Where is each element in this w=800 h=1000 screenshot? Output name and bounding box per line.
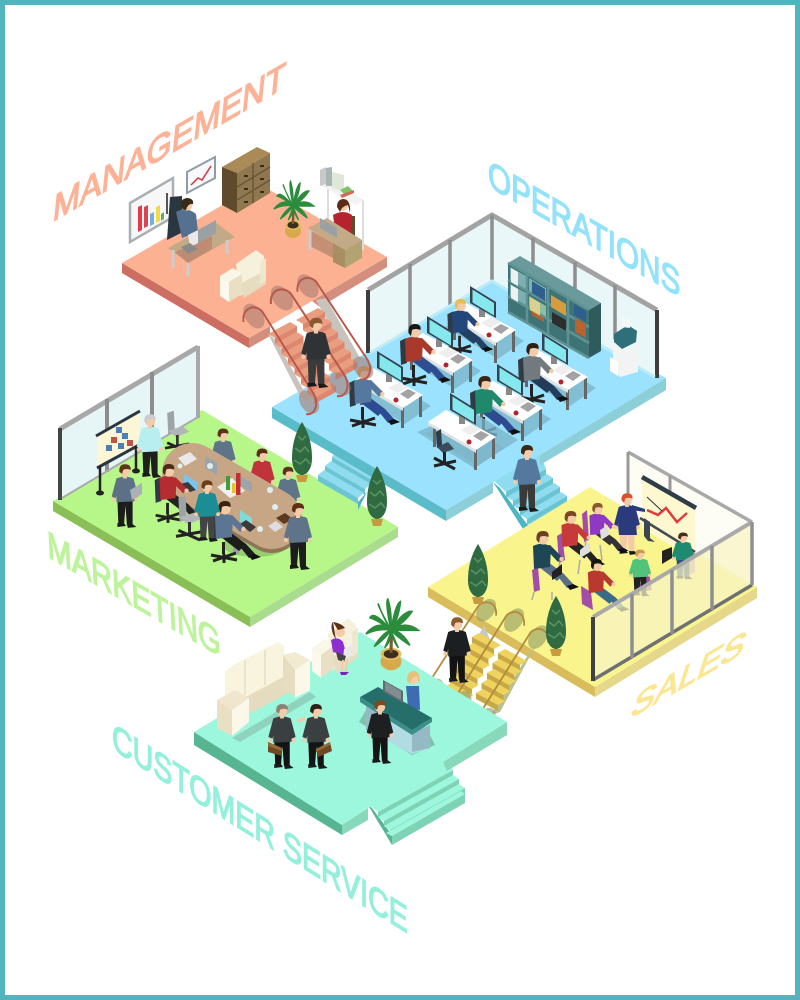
bookshelves — [508, 256, 601, 358]
man walking down stairs — [513, 445, 541, 512]
title label: Sales: SALES — [626, 623, 751, 728]
empty desk with chair — [417, 393, 518, 470]
operations glass walls — [368, 215, 657, 378]
receptionist — [406, 671, 420, 710]
desk with employee in red — [400, 316, 481, 393]
escalator steps — [239, 270, 377, 418]
man walking down escalator — [301, 318, 331, 388]
plant lower — [546, 596, 566, 656]
title label: Management: MANAGEMENT — [51, 55, 287, 231]
panel: sales room — [420, 452, 757, 734]
marketing floor — [53, 410, 398, 627]
title label: Marketing: MARKETING — [46, 524, 222, 666]
printer and water cooler — [610, 318, 638, 377]
empty chair by board — [165, 411, 189, 452]
escalator to customer service — [420, 595, 552, 734]
marketing glass wall — [60, 345, 198, 500]
meeting table — [151, 432, 313, 564]
man at reception — [367, 700, 393, 764]
potted palm — [274, 181, 314, 238]
left stairs — [318, 448, 378, 510]
wall line chart — [187, 157, 215, 193]
man walking on escalator — [443, 617, 471, 683]
businessman with briefcase right — [297, 704, 332, 769]
sales floor — [428, 487, 757, 697]
middle desk with employee in green — [470, 364, 551, 441]
large potted palm — [366, 599, 418, 670]
management floor — [122, 184, 387, 348]
customer service floor — [194, 632, 507, 835]
panel: marketing room — [53, 345, 398, 627]
front glass wall — [593, 522, 752, 681]
sofa — [217, 642, 316, 742]
panel: operations room — [272, 215, 666, 540]
back glass and chart board — [628, 452, 752, 585]
seated colleagues in front of table — [155, 464, 261, 563]
standing man right — [284, 503, 312, 570]
presentation board — [96, 411, 140, 496]
armchair — [220, 250, 266, 302]
back desk with blonde employee — [445, 286, 524, 363]
operations floor — [272, 280, 666, 521]
title label: Operations: OPERATIONS — [488, 153, 680, 306]
file cabinet — [222, 147, 270, 213]
standing woman in teal — [194, 480, 220, 542]
customer service stairs — [368, 760, 465, 845]
right desk with employee in gray — [517, 333, 596, 410]
boss chair, man and desk — [167, 196, 235, 276]
person with laptop — [112, 464, 142, 528]
panel: management room — [122, 147, 387, 418]
shelves with binders — [318, 167, 364, 250]
reception desk — [359, 680, 435, 755]
front-left desk with blond employee — [349, 351, 431, 428]
armchair with woman and laptop — [312, 618, 358, 678]
table shadow — [223, 533, 287, 557]
title label: Customer Service: CUSTOMER SERVICE — [112, 716, 408, 942]
colleagues behind table — [210, 428, 300, 554]
seated sales trainees — [532, 503, 695, 612]
panel: customer service room — [194, 599, 507, 845]
businessman with briefcase left — [268, 704, 296, 769]
plant lower — [367, 466, 387, 526]
wall bar chart — [130, 178, 173, 242]
standing man with tablet — [137, 414, 163, 478]
plant upper — [292, 422, 312, 482]
right stairs — [493, 453, 574, 540]
plant upper — [468, 544, 488, 604]
secretary and desk — [308, 199, 362, 268]
presenter — [614, 493, 662, 555]
